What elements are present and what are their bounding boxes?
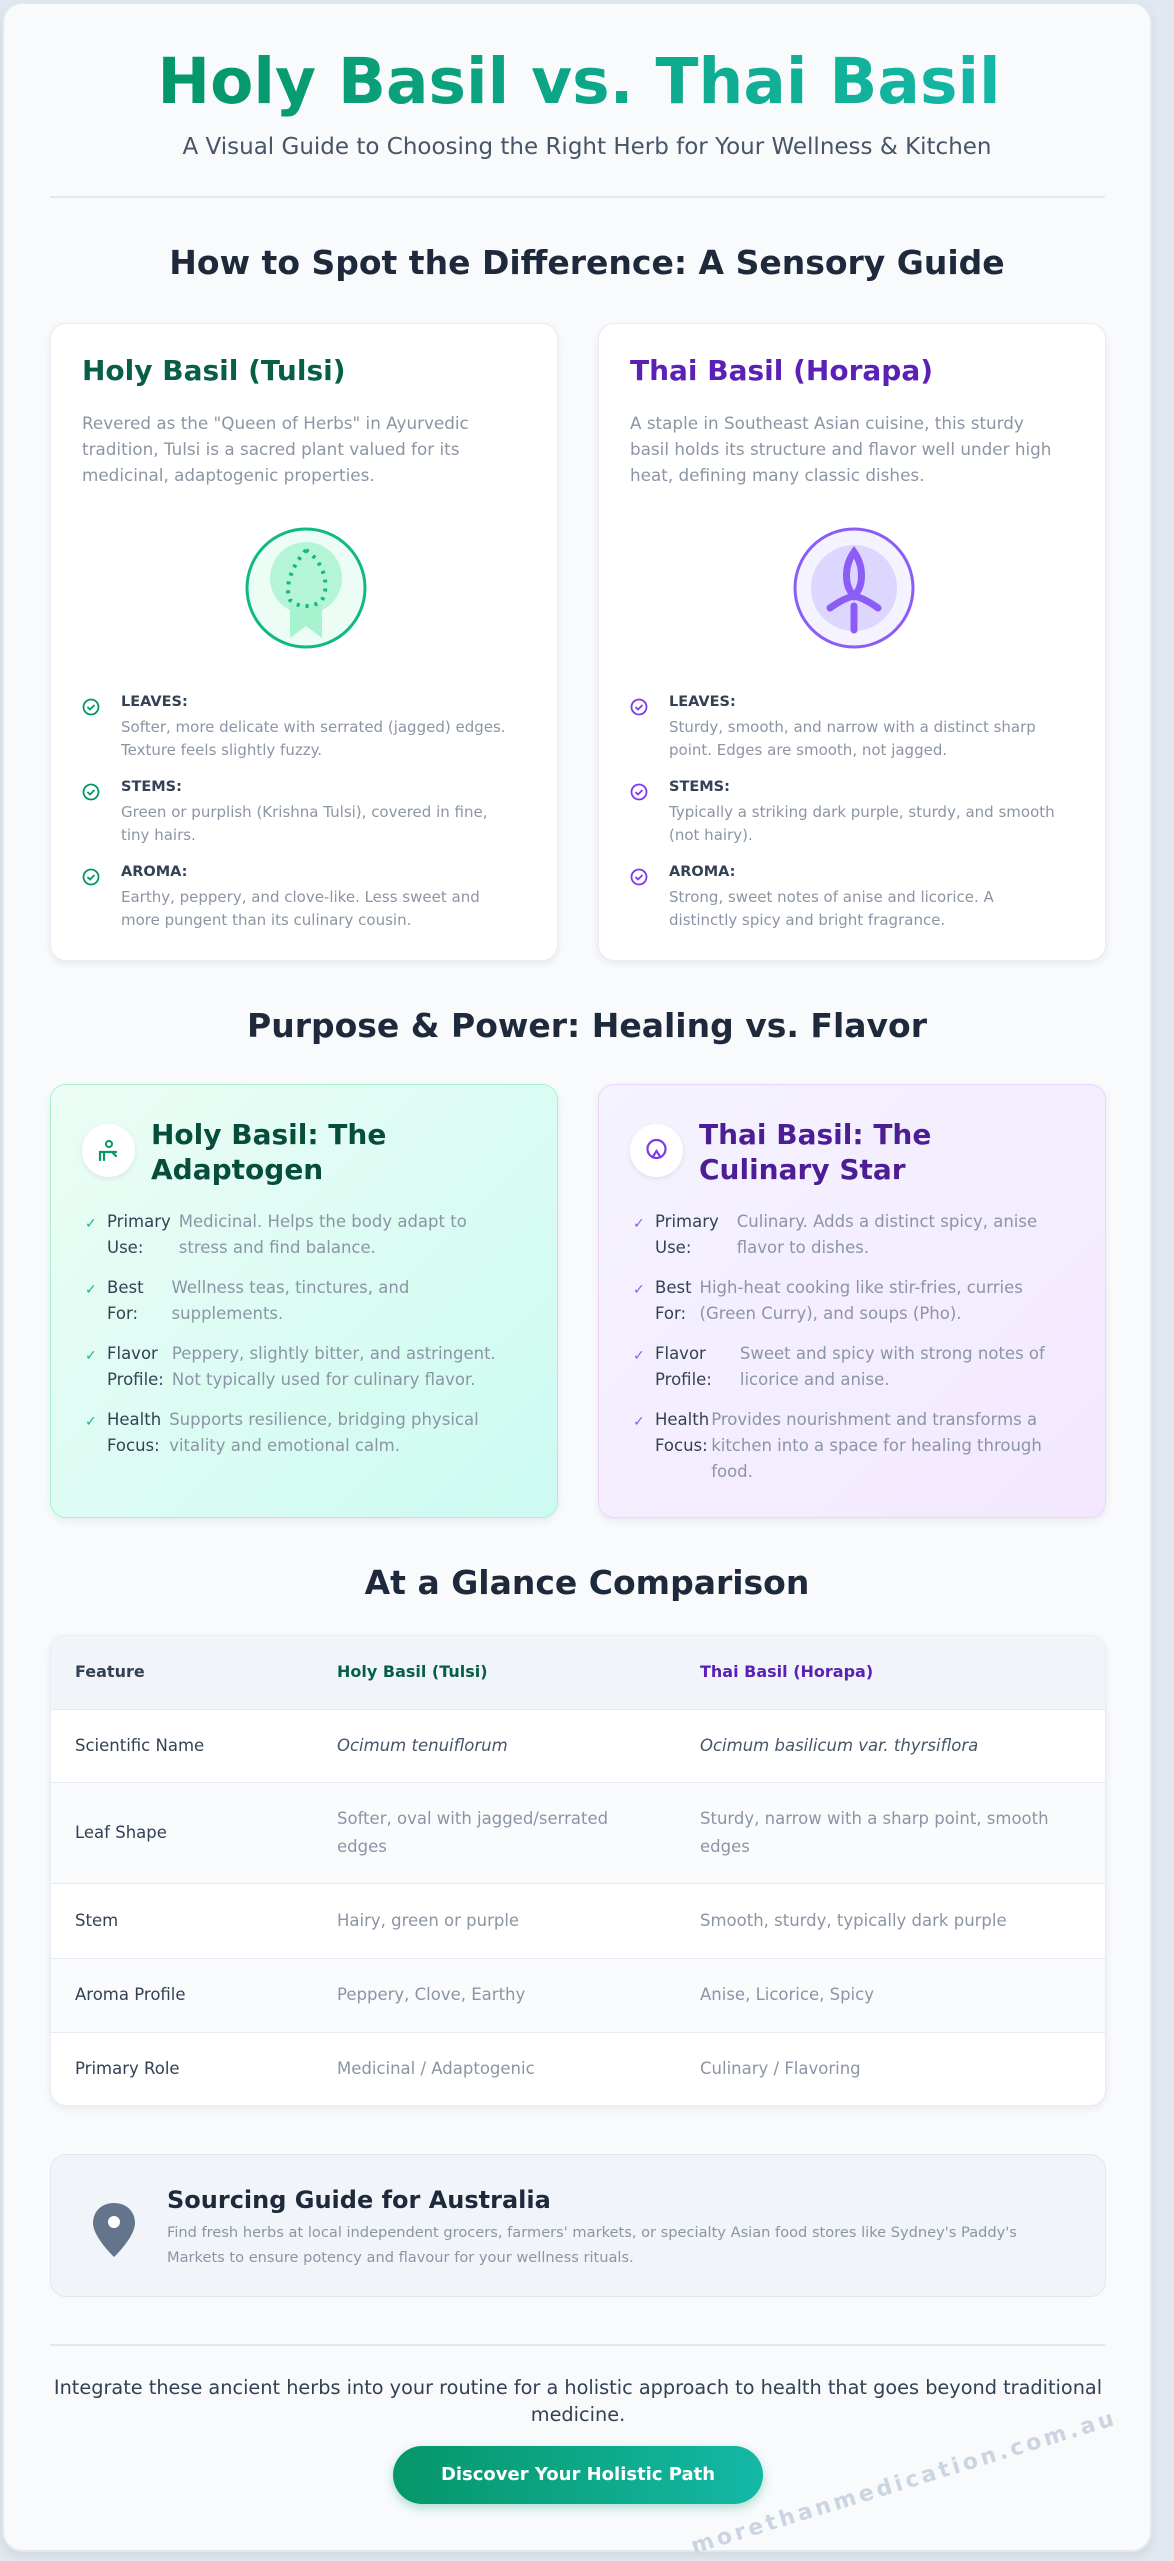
comparison table: Aroma Profile [75,1985,186,2004]
panel: holy basil sensory: Softer, more delicate with serrated (jagged) edges. Texture feels slightly fuzzy. [121,718,506,759]
comparison table: Stem [75,1910,118,1930]
item: health: Health [107,1410,161,1429]
panel title [151,1118,386,1186]
item: health: Provides nourishment and transforms a kitchen into a space for healing through food. [711,1410,1042,1481]
panel: thai basil sensory: LEAVES: [669,694,736,710]
comparison table: Ocimum tenuiflorum [337,1736,508,1754]
panel title: Holy Basil: The [151,1118,386,1151]
item: best for: For: [107,1304,138,1323]
panel: holy basil sensory: AROMA: [121,864,187,880]
item: health: Health [655,1410,709,1429]
icon: cooking [630,1124,683,1177]
description: A staple in Southeast Asian cuisine, this sturdy basil holds its structure and flavor well under high heat, defining many classic dishes. [630,413,1051,485]
comparison table: Holy Basil (Tulsi) [337,1662,488,1681]
item: leaves [630,694,1036,759]
item: health: ✓ [85,1414,97,1430]
panel: holy basil sensory: STEMS: [121,779,182,795]
watermark: morethanmedication.com.au [688,2406,1120,2559]
item: health: Focus: [107,1436,160,1455]
item: flavor: Flavor [107,1344,158,1363]
item: primary use: Primary [655,1212,719,1231]
panel: thai basil sensory: STEMS: [669,779,730,795]
panel title: Adaptogen [151,1153,323,1186]
item: leaves [82,694,506,759]
comparison table: Feature [75,1662,145,1681]
comparison table: Medicinal / Adaptogenic [337,2059,535,2078]
panel: holy basil sensory: Earthy, peppery, and clove-like. Less sweet and more pungent than its culinary cousin. [121,888,480,929]
callout: sourcing guide [50,2154,1106,2297]
comparison table [50,1635,1106,2106]
subtitle: A Visual Guide to Choosing the Right Herb for Your Wellness & Kitchen [182,134,992,160]
panel title [699,1118,931,1186]
panel: thai basil sensory: Sturdy, smooth, and narrow with a distinct sharp point. Edges are smooth, not jagged. [669,718,1036,759]
callout title: Sourcing Guide for Australia [167,2186,551,2214]
item: flavor: ✓ [85,1348,97,1364]
item: flavor: Profile: [107,1370,164,1389]
item: primary use: ✓ [85,1216,97,1232]
heading: purpose: Purpose & Power: Healing vs. Flavor [247,1006,927,1045]
card title: Thai Basil (Horapa) [630,354,933,387]
comparison table: Sturdy, narrow with a sharp point, smooth edges [700,1808,1049,1856]
button: CTA: Discover Your Holistic Path [441,2464,715,2485]
item: best for: Wellness teas, tinctures, and supplements. [172,1278,409,1323]
item: primary use: Use: [107,1238,143,1257]
item: primary use: Primary [107,1212,171,1231]
item: primary use: Use: [655,1238,691,1257]
panel: thai basil sensory [598,323,1106,961]
item: health: ✓ [633,1414,645,1430]
icon: meditation [82,1124,135,1177]
comparison table: Culinary / Flavoring [700,2059,861,2078]
comparison table: Primary Role [75,2059,180,2078]
item: stems [82,779,487,844]
item: health: Focus: [655,1436,708,1455]
comparison table: Scientific Name [75,1736,204,1754]
heading: sensory guide: How to Spot the Difference: A Sensory Guide [169,243,1005,282]
panel: thai basil sensory: Strong, sweet notes of anise and licorice. A distinctly spicy and bright fragrance. [669,888,994,929]
title: Holy Basil vs. Thai Basil [157,45,1001,118]
item: primary use: ✓ [633,1216,645,1232]
item: flavor: ✓ [633,1348,645,1364]
panel title: Thai Basil: The [699,1118,931,1151]
description: Revered as the "Queen of Herbs" in Ayurvedic tradition, Tulsi is a sacred plant valued for its medicinal, adaptogenic properties. [82,413,469,485]
item: best for: ✓ [633,1282,645,1298]
item: aroma [82,864,480,929]
item: flavor: Profile: [655,1370,712,1389]
comparison table: Thai Basil (Horapa) [700,1662,873,1681]
comparison table: Anise, Licorice, Spicy [700,1985,874,2004]
item: health: Supports resilience, bridging physical vitality and emotional calm. [169,1410,479,1455]
panel: holy basil adaptogen [50,1084,558,1518]
panel: thai basil sensory: Typically a striking dark purple, sturdy, and smooth (not hairy). [669,803,1055,844]
icon: tulsi leaf badge [246,528,366,648]
item: best for: High-heat cooking like stir-fries, curries (Green Curry), and soups (Pho). [700,1278,1023,1323]
icon: map pin [93,2203,135,2257]
panel title: Culinary Star [699,1153,906,1186]
comparison table: Softer, oval with jagged/serrated edges [337,1808,608,1856]
card title: Holy Basil (Tulsi) [82,354,346,387]
panel: thai basil sensory: AROMA: [669,864,735,880]
comparison table: Ocimum basilicum var. thyrsiflora [700,1736,978,1754]
item: best for: Best [655,1278,692,1297]
item: flavor: Peppery, slightly bitter, and astringent. Not typically used for culinary flavor. [172,1344,496,1389]
item: flavor: Sweet and spicy with strong notes of licorice and anise. [740,1344,1045,1389]
item: primary use: Culinary. Adds a distinct spicy, anise flavor to dishes. [737,1212,1037,1257]
item: best for: For: [655,1304,686,1323]
item: flavor: Flavor [655,1344,706,1363]
panel: holy basil sensory: Green or purplish (Krishna Tulsi), covered in fine, tiny hairs. [121,803,487,844]
callout text: Find fresh herbs at local independent grocers, farmers' markets, or specialty Asian food stores like Sydney's Paddy's Markets to ensure potency and flavour for your wellness rituals. [167,2224,1017,2266]
comparison table: Hairy, green or purple [337,1910,519,1930]
panel: thai basil culinary [598,1084,1106,1518]
item: stems [630,779,1055,844]
item: aroma [630,864,994,929]
comparison table: Smooth, sturdy, typically dark purple [700,1910,1007,1930]
item: primary use: Medicinal. Helps the body adapt to stress and find balance. [179,1212,467,1257]
item: best for: ✓ [85,1282,97,1298]
panel: holy basil sensory [50,323,558,961]
comparison table: Leaf Shape [75,1822,167,1842]
comparison table: Peppery, Clove, Earthy [337,1985,525,2004]
footer text: Integrate these ancient herbs into your routine for a holistic approach to health that goes beyond traditional medicine. [54,2376,1102,2426]
icon: thai basil sprig badge [794,528,914,648]
button: CTA [393,2446,763,2504]
panel: holy basil sensory: LEAVES: [121,694,188,710]
item: best for: Best [107,1278,144,1297]
heading: comparison: At a Glance Comparison [365,1563,809,1602]
